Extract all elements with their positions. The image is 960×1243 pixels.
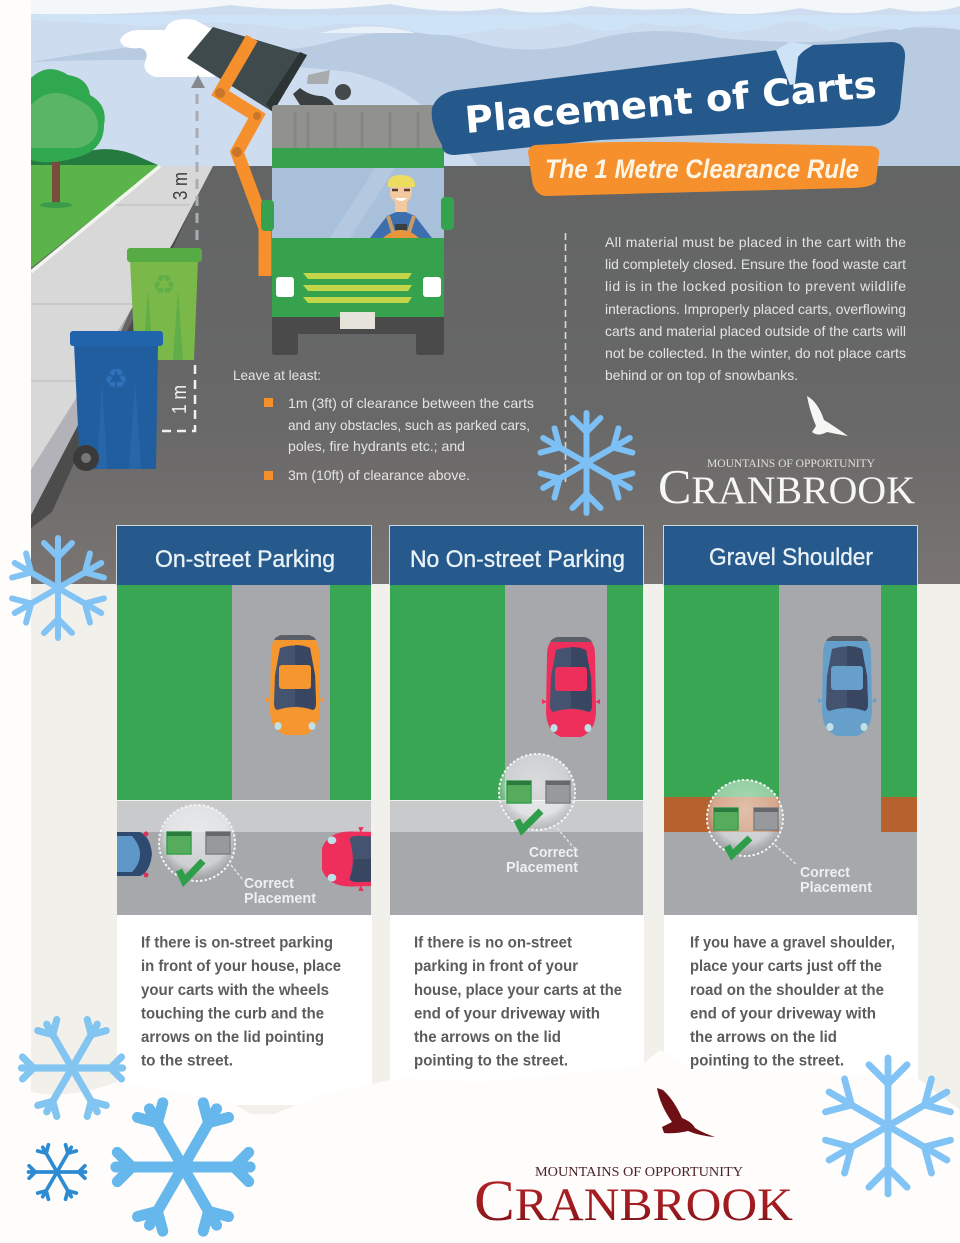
collection rules paragraph: All material must be placed in the cart with the: [605, 234, 906, 250]
snowflake left of panels: [8, 538, 108, 638]
no on-street parking description: [414, 934, 622, 1070]
panel: on-street parking: [116, 525, 372, 915]
lifting arm and tipping bin: [187, 27, 307, 276]
dashed measure: 1 m: 1 m: [169, 385, 191, 414]
white Cranbrook logo: [658, 396, 915, 514]
placement callout: Placement: [506, 859, 578, 876]
subtitle banner: The 1 Metre Clearance Rule: [545, 154, 859, 184]
sky and mountains: [31, 0, 960, 170]
panel header: Gravel Shoulder: [709, 544, 873, 571]
gravel shoulder description: end of your driveway with: [690, 1006, 876, 1022]
no on-street parking description: the arrows on the lid: [414, 1029, 561, 1046]
vertical dashed divider: [564, 233, 566, 485]
beige lower background: [31, 584, 960, 1114]
headlights: [276, 277, 441, 297]
magnifier with carts: [159, 805, 235, 881]
truck front body: [272, 238, 444, 317]
collection rules paragraph: lid is in the locked position to prevent wildlife: [605, 278, 906, 294]
truck wheels and bumper: [272, 316, 444, 355]
clearance list: poles, fire hydrants etc.; and: [288, 438, 465, 454]
bottom snow bank: [31, 1050, 960, 1243]
mirrors: [261, 197, 454, 231]
blue cart: ♻: [104, 364, 128, 395]
collection rules paragraph: behind or on top of snowbanks.: [605, 367, 798, 383]
driver: [370, 175, 432, 238]
on-street parking description: If there is on-street parking: [141, 934, 333, 952]
no on-street parking description: house, place your carts at the: [414, 982, 622, 999]
panel header: [390, 526, 644, 586]
white Cranbrook logo: MOUNTAINS OF OPPORTUNITY: [707, 456, 875, 470]
grille: [303, 273, 412, 303]
clearance list: Leave at least:: [233, 367, 321, 383]
gravel shoulder description: pointing to the street.: [690, 1052, 844, 1070]
blue cart: [70, 331, 163, 471]
collection rules paragraph: not be collected. In the winter, do not place carts: [605, 345, 906, 361]
red car: [542, 637, 600, 737]
collection rules paragraph: carts and material placed outside of the carts will: [605, 323, 906, 339]
white Cranbrook logo: CRANBROOK: [658, 459, 915, 514]
panel header: [116, 526, 372, 586]
magnifier with carts: [499, 754, 575, 830]
gravel shoulder description: the arrows on the lid: [690, 1029, 837, 1046]
no on-street parking description: If there is no on-street: [414, 934, 572, 952]
placement callout: [231, 865, 316, 907]
snowflake small bottom: [28, 1144, 86, 1200]
red Cranbrook logo: CRANBROOK: [474, 1168, 793, 1233]
clearance list: [233, 367, 534, 483]
snowflake over road: [536, 413, 637, 513]
placement callout: Placement: [244, 890, 316, 907]
placement callout: Placement: [800, 879, 872, 896]
green cart: [127, 248, 202, 360]
windshield: [272, 168, 444, 239]
magnifier with carts: [707, 780, 783, 856]
placement callout: Correct: [244, 875, 294, 892]
snowflake lower right: [820, 1058, 956, 1194]
blue car: [818, 636, 876, 736]
title banner: Placement of Carts: [463, 63, 878, 142]
clearance list: 1m (3ft) of clearance between the carts: [288, 395, 534, 411]
overhead street diagram: [390, 585, 643, 915]
on-street parking description: in front of your house, place: [141, 958, 341, 975]
curb and sidewalk: [31, 166, 213, 528]
placement callout: Correct: [529, 844, 578, 861]
no on-street parking description: parking in front of your: [414, 958, 578, 975]
grass and tree: [31, 69, 160, 272]
panel: gravel shoulder: [664, 526, 918, 915]
title banner: [432, 42, 905, 155]
snowflake large bottom: [116, 1102, 250, 1232]
parked cars: [117, 827, 371, 891]
placement callout: [775, 845, 872, 896]
collection rules paragraph: [605, 234, 906, 383]
panel header: On-street Parking: [155, 546, 335, 573]
on-street parking description: arrows on the lid pointing: [141, 1029, 324, 1046]
licence plate: [340, 312, 375, 329]
dashed measure: 3 m: 3 m: [170, 172, 192, 200]
truck hopper: [272, 105, 444, 150]
panel: no on-street parking: [390, 526, 644, 915]
eagle icon: [657, 1088, 715, 1137]
white text cards: [117, 915, 918, 1105]
green cart: ♻: [152, 270, 176, 301]
panel header: No On-street Parking: [410, 546, 625, 573]
gravel shoulder description: road on the shoulder at the: [690, 982, 884, 999]
on-street parking description: [141, 934, 341, 1070]
subtitle banner: [528, 142, 879, 196]
road: [31, 166, 960, 584]
truck cab stripe: [272, 148, 444, 168]
garbage truck: [261, 105, 454, 355]
cloud: [120, 19, 228, 77]
on-street parking description: to the street.: [141, 1052, 233, 1070]
collection rules paragraph: interactions. Improperly placed carts, overflowing: [605, 301, 906, 317]
clearance list: 3m (10ft) of clearance above.: [288, 467, 470, 483]
panel header: [664, 526, 918, 586]
no on-street parking description: pointing to the street.: [414, 1052, 568, 1070]
orange car: [266, 635, 324, 735]
red Cranbrook logo: [474, 1088, 793, 1233]
snowflake lower left: [21, 1019, 123, 1117]
gravel shoulder description: If you have a gravel shoulder,: [690, 934, 895, 952]
no on-street parking description: end of your driveway with: [414, 1006, 600, 1022]
dashed measure: 3 m: [170, 75, 205, 240]
overhead street diagram: [117, 585, 371, 915]
left white margin: [0, 14, 31, 1243]
collection rules paragraph: lid completely closed. Ensure the food waste cart: [605, 256, 906, 272]
placement callout: [506, 828, 578, 876]
on-street parking description: your carts with the wheels: [141, 982, 329, 999]
falling garbage: [293, 70, 351, 105]
clearance list: and any obstacles, such as parked cars,: [288, 417, 530, 433]
placement callout: Correct: [800, 864, 850, 881]
gravel shoulder description: place your carts just off the: [690, 958, 882, 975]
eagle icon: [807, 396, 848, 436]
on-street parking description: touching the curb and the: [141, 1006, 324, 1022]
overhead street diagram: [664, 585, 917, 915]
gravel shoulder description: [690, 934, 895, 1070]
red Cranbrook logo: MOUNTAINS OF OPPORTUNITY: [535, 1165, 743, 1180]
dashed measure: 1 m: [158, 365, 195, 431]
